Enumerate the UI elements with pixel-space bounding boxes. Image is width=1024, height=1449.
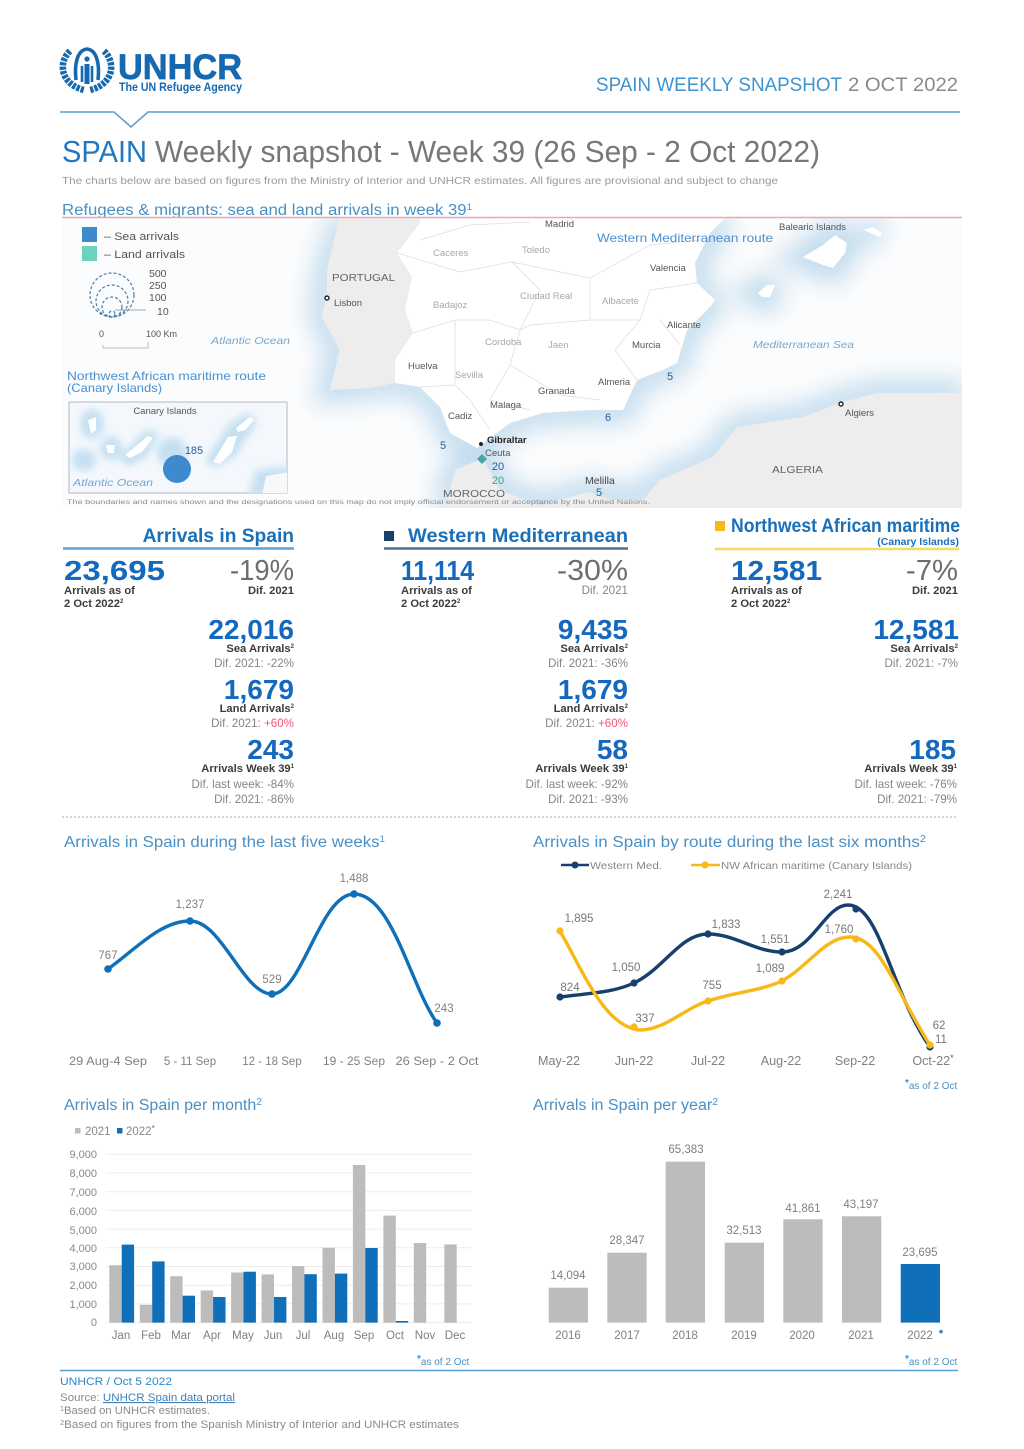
y axis labels: 5,000 xyxy=(69,1225,97,1237)
header label xyxy=(596,75,958,96)
y axis labels: 9,000 xyxy=(69,1149,97,1161)
panel: arrivals in Spain: 2 xyxy=(291,704,295,710)
inset: Canary Islands: Atlantic Ocean xyxy=(72,477,153,489)
data labels: 14,094 xyxy=(550,1270,586,1282)
sea labels: Mediterranean Sea xyxy=(753,339,854,351)
x axis labels: Oct xyxy=(386,1330,405,1342)
Iberian land xyxy=(322,216,727,448)
bars: 2022 xyxy=(122,1245,408,1323)
data labels: 1,089 xyxy=(756,963,784,975)
data labels: 23,695 xyxy=(902,1247,938,1259)
panel: Northwest African maritime: 1 xyxy=(954,764,958,770)
total: 23,695 xyxy=(64,555,165,586)
axis labels: 2019 xyxy=(731,1330,757,1342)
map base xyxy=(62,215,965,510)
axis labels: Aug-22 xyxy=(761,1054,801,1068)
y axis labels: 4,000 xyxy=(69,1243,97,1255)
data labels: 2,241 xyxy=(824,889,852,901)
axis labels: 2017 xyxy=(614,1330,640,1342)
panel: Western Mediterranean: 2 xyxy=(625,644,629,650)
header rule with chevron xyxy=(60,112,960,127)
note 2: Based on figures from the Spanish Ministry of Interior and UNHCR estimates xyxy=(64,1419,460,1431)
data labels: 1,833 xyxy=(712,919,740,931)
axis labels: 5 - 11 Sep xyxy=(164,1056,216,1068)
data labels: 755 xyxy=(702,980,722,992)
bubble: 185 xyxy=(163,445,203,483)
map heading: Refugees & migrants: sea and land arrivals in week 39 xyxy=(62,202,437,219)
arrival counts: 6 xyxy=(605,412,611,424)
place names: Madrid xyxy=(545,219,574,230)
data labels: 1,551 xyxy=(761,934,789,946)
place names: Melilla xyxy=(585,475,615,487)
panel: Western Mediterranean: Dif. 2021: -36% xyxy=(548,657,628,670)
pink rule under map heading xyxy=(62,216,962,218)
panel: arrivals in Spain: Dif. 2021 xyxy=(248,585,294,597)
route label: Northwest African: Northwest African maritime route xyxy=(67,369,266,383)
legend: NW African maritime (Canary Islands) xyxy=(721,860,912,872)
place names: Balearic Islands xyxy=(779,222,846,233)
note 1: 1 xyxy=(60,1406,64,1413)
header label: SPAIN WEEKLY SNAPSHOT xyxy=(596,75,842,96)
place names: Jaen xyxy=(548,340,569,351)
panel: arrivals in Spain: Dif. last week: -84% xyxy=(192,778,294,791)
panel: Northwest African maritime: Dif. 2021: -7% xyxy=(885,657,958,670)
subtitle: The charts below are based on figures from the Ministry of Interior and UNHCR estimates. All figures are provisional and subject to change xyxy=(62,175,778,187)
panel: Western Mediterranean: 2 xyxy=(457,599,461,605)
legend: scale bar xyxy=(99,329,177,348)
legend: proportional circles: 500 xyxy=(149,268,167,280)
x axis labels: Dec xyxy=(445,1330,465,1342)
legend: 2021 xyxy=(85,1126,111,1138)
sea labels xyxy=(210,335,854,351)
place names: ALGERIA xyxy=(772,465,823,476)
logo: UNHCR xyxy=(63,48,243,94)
sea arrivals: 12,581 xyxy=(873,614,959,645)
panel: Northwest African maritime: Dif. last week: -76% xyxy=(855,778,957,791)
panel: arrivals in Spain: 2 xyxy=(291,644,295,650)
axis labels: 2018 xyxy=(672,1330,698,1342)
data labels: 1,760 xyxy=(825,924,853,936)
markers xyxy=(104,890,441,1027)
place names: Gibraltar xyxy=(487,435,527,446)
place names: Sevilla xyxy=(455,370,484,381)
data labels: 529 xyxy=(262,974,282,986)
data labels xyxy=(550,1144,938,1282)
heading: (Canary Islands) xyxy=(877,536,959,548)
week arrivals: 243 xyxy=(247,734,294,765)
place names: Malaga xyxy=(490,400,522,411)
footer rule xyxy=(60,1370,958,1372)
legend xyxy=(561,860,912,872)
panel: Northwest African maritime: 2 xyxy=(787,599,791,605)
place names: Caceres xyxy=(433,248,469,259)
note: as of 2 Oct xyxy=(909,1081,957,1092)
data labels xyxy=(560,889,947,1046)
legend: scale bar: 0 xyxy=(99,329,104,339)
panel: arrivals in Spain xyxy=(63,526,295,806)
note: * xyxy=(905,1354,909,1365)
title: Weekly snapshot - Week 39 (26 Sep - 2 Oct 2022) xyxy=(155,134,820,169)
axis labels: Sep-22 xyxy=(835,1054,875,1068)
gridlines xyxy=(106,1154,472,1323)
x axis labels: Nov xyxy=(415,1330,435,1342)
panel: arrivals in Spain: Arrivals as of xyxy=(64,585,135,597)
data labels: 243 xyxy=(434,1003,454,1015)
panel: Western Mediterranean: 2 Oct 2022 xyxy=(401,598,457,610)
place names: Murcia xyxy=(632,340,661,351)
legend: Western Med. xyxy=(590,860,662,872)
line: Western Med xyxy=(560,905,930,1047)
place names: Almeria xyxy=(598,377,631,388)
axis labels: 2016 xyxy=(555,1330,581,1342)
panel: Western Mediterranean: -30% xyxy=(557,555,628,587)
wordmark: UNHCR xyxy=(118,48,242,87)
legend: * xyxy=(152,1124,155,1133)
panel: arrivals in Spain: Dif. 2021: -22% xyxy=(214,657,294,670)
panel: Western Mediterranean: Arrivals Week 39 xyxy=(535,763,625,775)
data labels: 65,383 xyxy=(668,1144,704,1156)
panel: arrivals in Spain: Sea Arrivals xyxy=(226,643,291,655)
axis labels: * xyxy=(950,1053,954,1063)
arrival counts: 20 xyxy=(492,461,504,473)
icon: wreath and shelter xyxy=(63,49,111,90)
title: SPAIN xyxy=(62,134,147,169)
North Africa xyxy=(445,393,965,510)
x axis labels: Jan xyxy=(112,1330,130,1342)
panel: Northwest African maritime: Sea Arrivals xyxy=(890,643,955,655)
panel: arrivals in Spain: Land Arrivals xyxy=(220,703,291,715)
panel: Western Mediterranean: Sea Arrivals xyxy=(560,643,625,655)
arrival counts: 5 xyxy=(667,371,673,383)
place names: Huelva xyxy=(408,361,438,372)
x axis labels: May xyxy=(232,1330,254,1342)
axis labels: 26 Sep - 2 Oct xyxy=(396,1056,479,1068)
bars: 2021 xyxy=(109,1165,457,1323)
tagline: The UN Refugee Agency xyxy=(119,82,243,94)
x axis labels: Aug xyxy=(324,1330,344,1342)
panel: Northwest African maritime: Arrivals as of xyxy=(731,585,802,597)
legend: scale bar: 100 Km xyxy=(146,329,177,339)
data labels: 28,347 xyxy=(609,1235,645,1247)
legend: 2022 xyxy=(126,1126,152,1138)
panel: Western Mediterranean: Dif. last week: -92% xyxy=(526,778,628,791)
place names: Badajoz xyxy=(433,300,468,311)
heading: Arrivals in Spain by route during the last six months xyxy=(533,834,885,851)
axis labels xyxy=(555,1328,944,1342)
panel: arrivals in Spain: Dif. 2021: -86% xyxy=(214,793,294,806)
panel: arrivals in Spain: Arrivals Week 39 xyxy=(201,763,291,775)
data labels: 1,895 xyxy=(565,913,593,925)
chart: last five weeks xyxy=(64,834,479,1068)
x axis labels xyxy=(112,1330,465,1342)
arrival counts xyxy=(440,371,673,499)
panel: Northwest African maritime: 2 Oct 2022 xyxy=(731,598,787,610)
axis labels: Oct-22 xyxy=(912,1054,950,1068)
panel: arrivals in Spain: 2 xyxy=(120,599,124,605)
place names xyxy=(325,219,874,500)
Balearic islands xyxy=(758,227,882,297)
panel: Northwest African maritime: -7% xyxy=(906,555,958,587)
legend: proportional circles: 250 xyxy=(149,280,167,292)
axis labels: * xyxy=(939,1328,944,1340)
axis labels: Jul-22 xyxy=(691,1054,725,1068)
note 1: Based on UNHCR estimates. xyxy=(64,1405,210,1417)
x axis labels: Jun xyxy=(264,1330,282,1342)
data labels: 1,488 xyxy=(340,873,368,885)
data labels: 43,197 xyxy=(843,1199,879,1211)
legend: proportional circles: 100 xyxy=(149,292,167,304)
y axis labels: 1,000 xyxy=(69,1299,97,1311)
inset: Canary Islands xyxy=(69,402,290,495)
place names: Cadiz xyxy=(448,411,473,422)
legend: colour keys xyxy=(82,227,186,261)
markers xyxy=(556,905,934,1051)
map disclaimer: The boundaries and names shown and the designations used on this map do not imply official endorsement or acceptance by the United Nations. xyxy=(67,499,650,506)
place names: PORTUGAL xyxy=(332,273,395,284)
x axis labels: Mar xyxy=(171,1330,191,1342)
panel: arrivals in Spain: Dif. 2021: +60% xyxy=(211,717,294,730)
place names: Lisbon xyxy=(334,298,362,309)
y axis labels: 8,000 xyxy=(69,1168,97,1180)
axis labels: 19 - 25 Sep xyxy=(323,1056,385,1068)
note 2: 2 xyxy=(60,1420,64,1427)
total: 11,114 xyxy=(401,555,474,586)
date line: UNHCR / Oct 5 2022 xyxy=(60,1376,172,1388)
heading: Arrivals in Spain xyxy=(143,526,294,547)
y axis labels: 0 xyxy=(91,1317,97,1329)
place names: Ciudad Real xyxy=(520,291,572,302)
axis labels: 2021 xyxy=(848,1330,874,1342)
heading: Northwest African maritime xyxy=(731,516,960,537)
legend: proportional circles: 10 xyxy=(157,306,169,318)
place names: Alicante xyxy=(667,320,701,331)
week arrivals: 58 xyxy=(597,734,628,765)
panel: Western Mediterranean xyxy=(384,526,629,806)
route label: Western Mediterranean: Western Mediterranean route xyxy=(597,231,773,245)
chart: by route, last six months xyxy=(533,834,957,1092)
panel: Western Mediterranean: Arrivals as of xyxy=(401,585,472,597)
panel: Western Mediterranean: 1 xyxy=(625,764,629,770)
line xyxy=(108,894,437,1023)
x axis labels: Sep xyxy=(354,1330,374,1342)
place names: Valencia xyxy=(650,263,686,274)
data labels: 41,861 xyxy=(785,1203,821,1215)
axis labels xyxy=(69,1056,479,1068)
legend: colour keys: – Sea arrivals xyxy=(104,231,180,243)
bubble: 185: 185 xyxy=(185,445,203,457)
heading: Arrivals in Spain per month xyxy=(64,1097,250,1114)
heading: 2 xyxy=(920,834,926,845)
Portugal xyxy=(322,216,420,390)
data labels: 11 xyxy=(935,1034,947,1046)
chart: per month xyxy=(64,1097,472,1368)
panel: Northwest African maritime: 2 xyxy=(955,644,959,650)
axis labels: Jun-22 xyxy=(615,1054,653,1068)
axis labels: 2020 xyxy=(789,1330,815,1342)
y axis labels xyxy=(69,1149,97,1329)
route label: Northwest African: (Canary Islands) xyxy=(67,381,162,395)
place names: Albacete xyxy=(602,296,639,307)
sea labels: Atlantic Ocean xyxy=(210,335,290,347)
heading xyxy=(715,516,960,549)
panel: arrivals in Spain: 2 Oct 2022 xyxy=(64,598,120,610)
arrival counts: 5 xyxy=(596,487,602,499)
place names: Cordoba xyxy=(485,337,522,348)
x axis labels: Feb xyxy=(141,1330,161,1342)
sea arrivals: 22,016 xyxy=(208,614,294,645)
footer xyxy=(60,1376,460,1431)
y axis labels: 2,000 xyxy=(69,1280,97,1292)
place names: Granada xyxy=(538,386,576,397)
line: NW African xyxy=(560,931,930,1045)
axis labels: 2022 xyxy=(907,1330,933,1342)
legend: colour keys: – Land arrivals xyxy=(104,249,186,261)
place names: Toledo xyxy=(522,245,550,256)
panel: map xyxy=(62,215,965,510)
heading: Arrivals in Spain per year xyxy=(533,1097,706,1114)
panel: Western Mediterranean: Dif. 2021: +60% xyxy=(545,717,628,730)
place names: Algiers xyxy=(845,408,874,419)
data labels: 824 xyxy=(560,982,580,994)
heading: Arrivals in Spain during the last five weeks xyxy=(64,834,354,851)
data labels: 1,050 xyxy=(612,962,640,974)
land arrivals: 1,679 xyxy=(224,674,294,705)
map heading: 1 xyxy=(467,202,472,212)
place names: Ceuta xyxy=(485,448,511,459)
x axis labels: Apr xyxy=(203,1330,221,1342)
header label: 2 OCT 2022 xyxy=(848,75,958,96)
axis labels xyxy=(538,1053,954,1068)
y axis labels: 6,000 xyxy=(69,1206,97,1218)
total: 12,581 xyxy=(731,555,822,586)
panel: Northwest African maritime: Arrivals Week 39 xyxy=(864,763,954,775)
arrival counts: 20 xyxy=(492,475,504,487)
panel: arrivals in Spain: 1 xyxy=(291,764,295,770)
arrival counts: 5 xyxy=(440,440,446,452)
chart: per year xyxy=(533,1097,957,1368)
x axis labels: Jul xyxy=(296,1330,310,1342)
data labels: 337 xyxy=(635,1013,655,1025)
data labels: 62 xyxy=(933,1020,945,1032)
axis labels: May-22 xyxy=(538,1054,580,1068)
panel: Western Mediterranean: 2 xyxy=(625,704,629,710)
axis labels: 12 - 18 Sep xyxy=(242,1056,302,1068)
heading: 1 xyxy=(380,834,385,844)
y axis labels: 7,000 xyxy=(69,1187,97,1199)
note: * xyxy=(905,1078,909,1089)
panel: arrivals in Spain: -19% xyxy=(230,555,294,587)
panel: Northwest African maritime: Dif. 2021: -79% xyxy=(877,793,957,806)
heading: 2 xyxy=(256,1097,262,1108)
data labels xyxy=(98,873,454,1015)
bar: 2022 xyxy=(901,1264,940,1323)
data labels: 767 xyxy=(98,950,118,962)
panel: Western Mediterranean: Land Arrivals xyxy=(554,703,625,715)
inset: Canary Islands: Canary Islands xyxy=(133,406,197,417)
note: as of 2 Oct xyxy=(909,1357,957,1368)
sea arrivals: 9,435 xyxy=(558,614,628,645)
data labels: 32,513 xyxy=(726,1225,762,1237)
source: Source: UNHCR Spain data portal xyxy=(60,1392,235,1404)
province borders xyxy=(397,222,700,430)
legend xyxy=(75,1124,155,1138)
note: * xyxy=(417,1354,421,1365)
panel: Northwest African maritime xyxy=(715,516,960,806)
week arrivals: 185 xyxy=(909,734,956,765)
legend: proportional circles xyxy=(90,268,169,318)
note: as of 2 Oct xyxy=(421,1357,469,1368)
data labels: 1,237 xyxy=(176,899,204,911)
land arrivals: 1,679 xyxy=(558,674,628,705)
bars xyxy=(549,1162,881,1323)
panel: Northwest African maritime: Dif. 2021 xyxy=(912,585,958,597)
panel: Western Mediterranean: Dif. 2021: -93% xyxy=(548,793,628,806)
heading: 2 xyxy=(712,1097,718,1108)
panel: Western Mediterranean: Dif. 2021 xyxy=(582,584,628,597)
place names: MOROCCO xyxy=(443,489,505,500)
y axis labels: 3,000 xyxy=(69,1261,97,1273)
axis labels: 29 Aug-4 Sep xyxy=(69,1056,147,1068)
route label: Northwest African xyxy=(67,369,266,395)
heading: Western Mediterranean xyxy=(408,526,628,547)
